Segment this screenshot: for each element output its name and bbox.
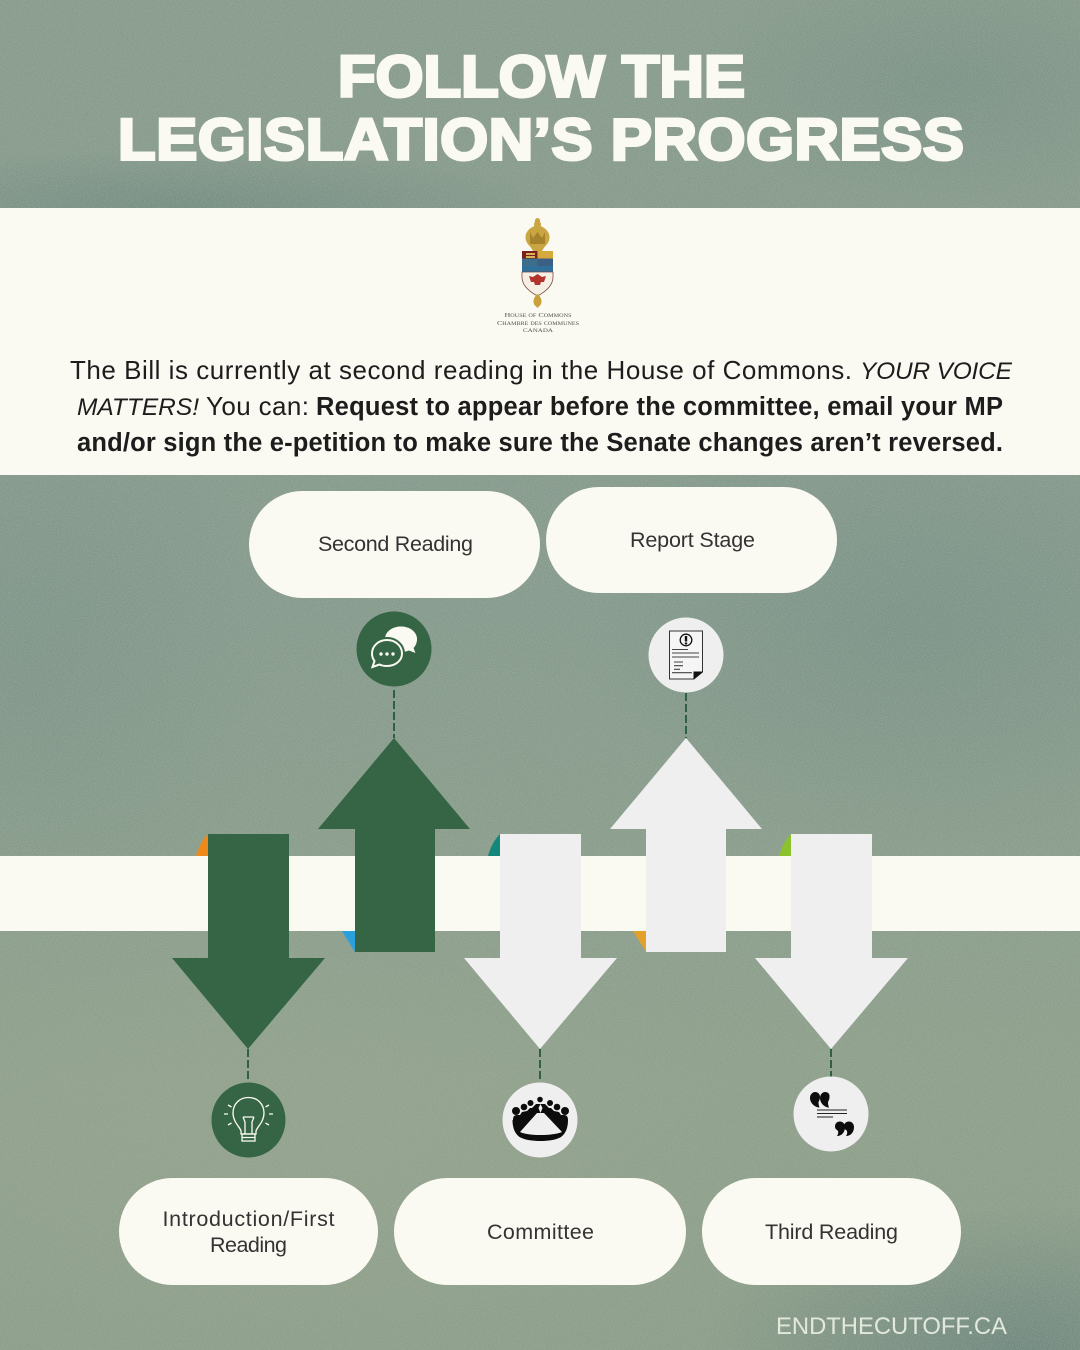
footer url: ENDTHECUTOFF.CA [776,1313,1007,1340]
intro text [70,355,1013,457]
intro text: You can: [206,391,309,421]
logo wordmark: Chambre des communes [497,320,579,327]
intro text: MATTERS! [77,394,199,421]
logo: House of Commons crest [497,218,579,334]
icon: report document [648,618,724,692]
connectors [248,690,831,1082]
pill: Introduction/First Reading: Introduction/First [162,1207,335,1231]
arrow: up white, report stage [610,738,762,952]
pill: Second Reading: Second Reading [318,532,473,556]
title [118,44,964,172]
timeline band [0,856,1080,931]
pill: Committee [394,1178,686,1285]
icon: committee table [502,1082,578,1158]
logo wordmark: CANADA [523,328,553,334]
arrow: down green, first reading [172,834,325,1049]
accent: lime tab [779,834,791,856]
pill: Second Reading [249,491,540,598]
pill: Report Stage [546,487,837,593]
arrow: up green, second reading [318,738,470,952]
pill: Introduction/First Reading: Reading [210,1233,287,1257]
logo wordmark [497,312,579,334]
pill: Report Stage: Report Stage [630,528,755,552]
intro text: and/or sign the e-petition to make sure the Senate changes aren’t reversed. [77,429,1003,457]
icon: light bulb [212,1082,286,1158]
pill: Committee: Committee [487,1220,594,1244]
arrow: down white, third reading [755,834,908,1049]
arrow: down white, committee [464,834,617,1049]
title: LEGISLATION’S PROGRESS [118,107,964,172]
icon: speech bubbles [356,612,432,686]
accent: orange tab [196,834,208,856]
pill: Third Reading: Third Reading [765,1220,898,1244]
title: FOLLOW THE [338,44,745,109]
pill: Introduction/First Reading [119,1178,378,1285]
logo wordmark: House of Commons [504,312,572,319]
intro text: The Bill is currently at second reading in the House of Commons. [70,355,852,385]
intro text: Request to appear before the committee, email your MP [316,393,1003,421]
accent: gold tab [633,931,646,952]
panel: intro band [0,208,1080,475]
accent: blue tab [342,931,355,952]
icon: quotation [794,1076,868,1152]
pill: Third Reading [702,1178,961,1285]
intro text: YOUR VOICE [860,358,1013,385]
accent: teal tab [488,834,500,856]
